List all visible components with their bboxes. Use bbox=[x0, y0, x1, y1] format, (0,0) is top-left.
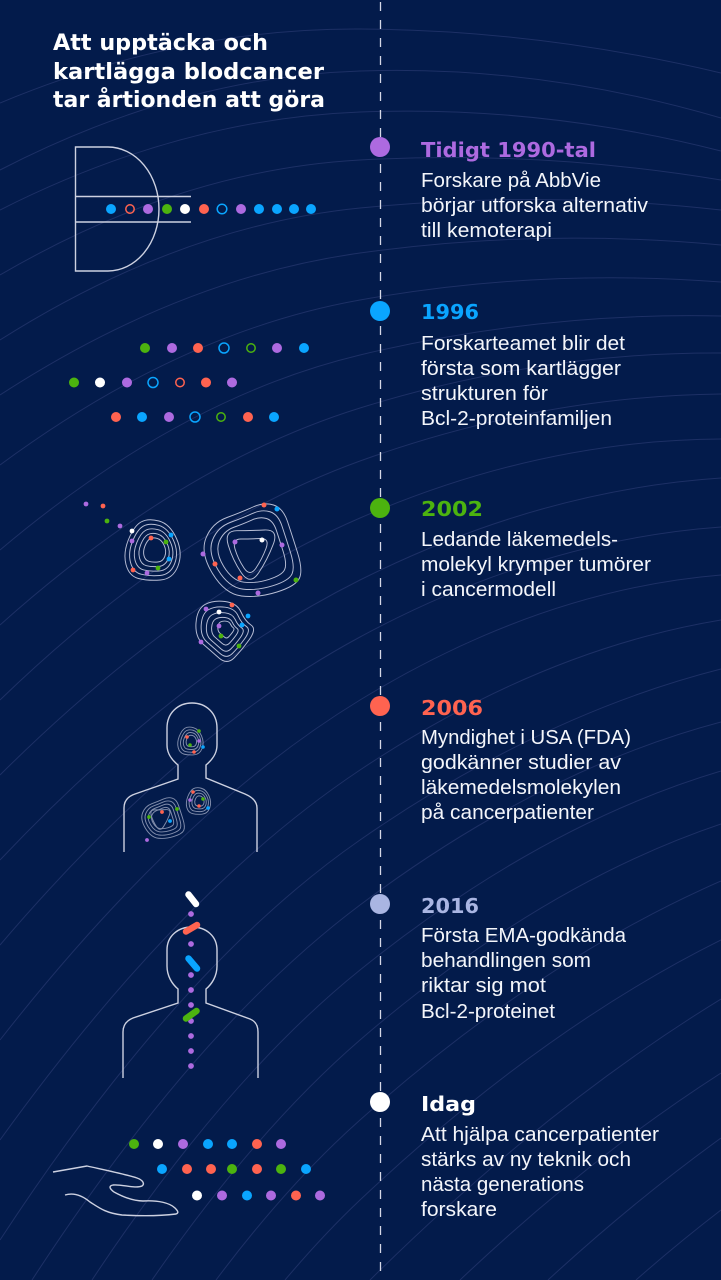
description: early 1990s: Forskare på AbbVie bbox=[421, 169, 601, 192]
timeline node: early 1990s bbox=[370, 137, 390, 157]
title bbox=[53, 30, 325, 113]
milestone: 1996 bbox=[370, 300, 625, 430]
description: 2002: Ledande läkemedels- bbox=[421, 528, 618, 551]
tumour C bbox=[196, 601, 254, 662]
title: tar årtionden att göra bbox=[53, 86, 325, 113]
description: early 1990s: börjar utforska alternativ bbox=[421, 194, 649, 217]
timeline node: 1996 bbox=[370, 301, 390, 321]
description: 1996: strukturen för bbox=[421, 382, 548, 405]
description: 2006: Myndighet i USA (FDA) bbox=[421, 726, 631, 749]
icon: human silhouette with targeted molecules bbox=[123, 894, 258, 1078]
timeline node: 2002 bbox=[370, 498, 390, 518]
year heading: Idag: Idag bbox=[421, 1092, 476, 1116]
year heading: 2016: 2016 bbox=[421, 894, 479, 918]
description: today: nästa generations bbox=[421, 1173, 584, 1196]
description: 2006: på cancerpatienter bbox=[421, 801, 594, 824]
description: early 1990s bbox=[421, 169, 649, 242]
year heading: 2006: 2006 bbox=[421, 696, 483, 720]
head tumour bbox=[178, 727, 203, 755]
icon: human silhouette with tumours bbox=[124, 703, 257, 852]
description: 2016: riktar sig mot bbox=[421, 974, 546, 997]
description: 2006: godkänner studier av bbox=[421, 751, 622, 774]
description: 2006 bbox=[421, 726, 631, 824]
description: today: Att hjälpa cancerpatienter bbox=[421, 1123, 659, 1146]
icon: shrinking tumours with contour rings bbox=[84, 502, 301, 662]
description: 2016: behandlingen som bbox=[421, 949, 591, 972]
milestone: early 1990s bbox=[370, 137, 649, 242]
timeline node: 2006 bbox=[370, 696, 390, 716]
description: 2016: Första EMA-godkända bbox=[421, 924, 627, 947]
icon: hand with rows of dots bbox=[53, 1139, 325, 1216]
description: 1996: Forskarteamet blir det bbox=[421, 332, 625, 355]
description: 1996 bbox=[421, 332, 625, 430]
description: today: forskare bbox=[421, 1198, 497, 1221]
milestone: 2002 bbox=[370, 497, 651, 601]
milestone: 2016 bbox=[370, 894, 627, 1023]
tumour A bbox=[125, 520, 180, 580]
description: 1996: Bcl-2-proteinfamiljen bbox=[421, 407, 612, 430]
timeline node: 2016 bbox=[370, 894, 390, 914]
milestone: 2006 bbox=[370, 696, 631, 824]
title: Att upptäcka och bbox=[53, 30, 268, 56]
description: 2002: molekyl krymper tumörer bbox=[421, 553, 651, 576]
year heading: 1996: 1996 bbox=[421, 300, 479, 324]
description: 1996: första som kartlägger bbox=[421, 357, 621, 380]
description: 2002 bbox=[421, 528, 651, 601]
description: 2002: i cancermodell bbox=[421, 578, 556, 601]
timeline: dashed line bbox=[380, 2, 382, 1280]
icon: D-shaped protein with dot chain bbox=[76, 147, 316, 271]
timeline node: today bbox=[370, 1092, 390, 1112]
year heading: Tidigt 1990-tal: Tidigt 1990-tal bbox=[421, 138, 596, 162]
chest tumour left bbox=[142, 798, 184, 838]
description: 2016 bbox=[421, 924, 627, 1023]
year heading: 2002: 2002 bbox=[421, 497, 483, 521]
chest tumour right bbox=[186, 788, 211, 814]
description: today: stärks av ny teknik och bbox=[421, 1148, 631, 1171]
description: 2016: Bcl-2-proteinet bbox=[421, 1000, 555, 1023]
title: kartlägga blodcancer bbox=[53, 59, 325, 85]
description: today bbox=[421, 1123, 659, 1221]
tumour B bbox=[204, 504, 301, 596]
description: early 1990s: till kemoterapi bbox=[421, 219, 552, 242]
milestone: today bbox=[370, 1092, 659, 1221]
icon: three rows of coloured dots bbox=[69, 343, 309, 422]
description: 2006: läkemedelsmolekylen bbox=[421, 776, 621, 799]
